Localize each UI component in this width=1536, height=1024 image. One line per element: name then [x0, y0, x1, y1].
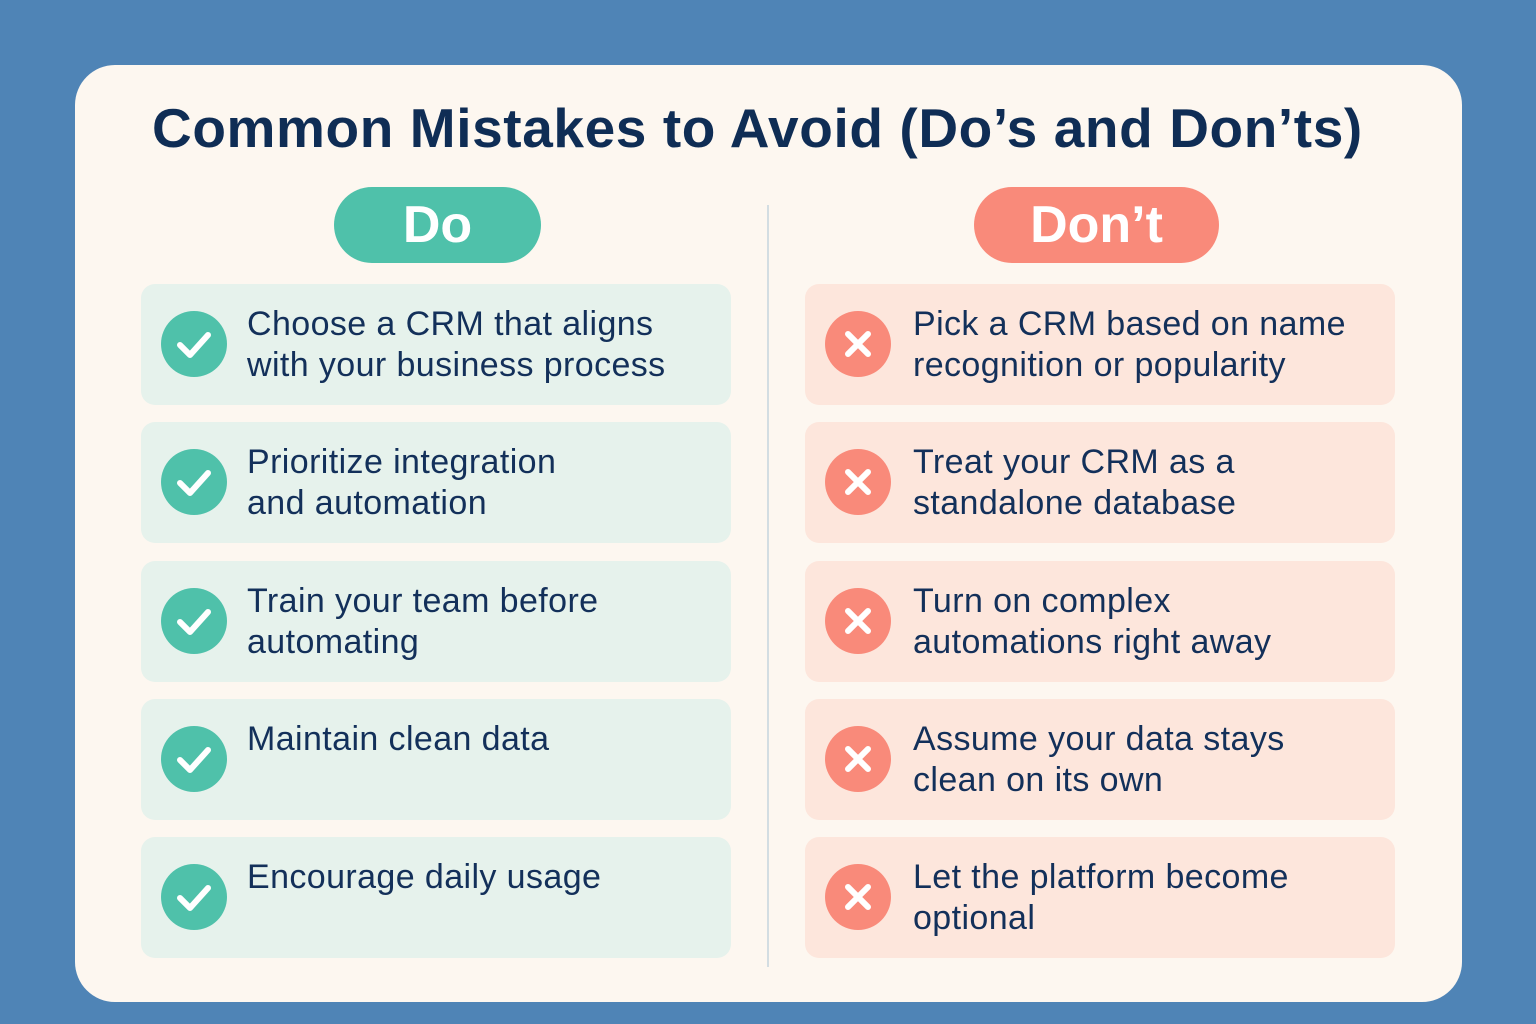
dont item 5: Let the platform become	[913, 858, 1289, 896]
do item 2: Prioritize integration	[247, 443, 556, 481]
do item 1: with your business process	[247, 346, 666, 384]
do item 2: and automation	[247, 484, 487, 522]
pill: Do	[334, 187, 541, 263]
do item 4: Maintain clean data	[247, 720, 549, 758]
do item 3	[141, 561, 731, 682]
dont item 5: optional	[913, 899, 1035, 937]
pill: Don't: Don’t	[1030, 196, 1163, 254]
dont item 4: clean on its own	[913, 761, 1163, 799]
dont item 2: standalone database	[913, 484, 1236, 522]
do item 3: Train your team before	[247, 582, 598, 620]
dont item 2	[805, 422, 1395, 543]
pill: Don't	[974, 187, 1219, 263]
dont item 4	[805, 699, 1395, 820]
do item 1	[141, 284, 731, 405]
dont item 1	[805, 284, 1395, 405]
dont item 3	[805, 561, 1395, 682]
do item 1: Choose a CRM that aligns	[247, 305, 653, 343]
pill: Do: Do	[403, 196, 472, 254]
do item 5	[141, 837, 731, 958]
dont item 5	[805, 837, 1395, 958]
do item 3: automating	[247, 623, 419, 661]
dont item 3: automations right away	[913, 623, 1271, 661]
do item 4	[141, 699, 731, 820]
dont item 4: Assume your data stays	[913, 720, 1285, 758]
do item 2	[141, 422, 731, 543]
do item 5: Encourage daily usage	[247, 858, 601, 896]
dont item 1: recognition or popularity	[913, 346, 1286, 384]
title: Common Mistakes to Avoid (Do’s and Don’ts)	[152, 97, 1363, 159]
dont item 2: Treat your CRM as a	[913, 443, 1235, 481]
dont item 1: Pick a CRM based on name	[913, 305, 1346, 343]
dont item 3: Turn on complex	[913, 582, 1171, 620]
